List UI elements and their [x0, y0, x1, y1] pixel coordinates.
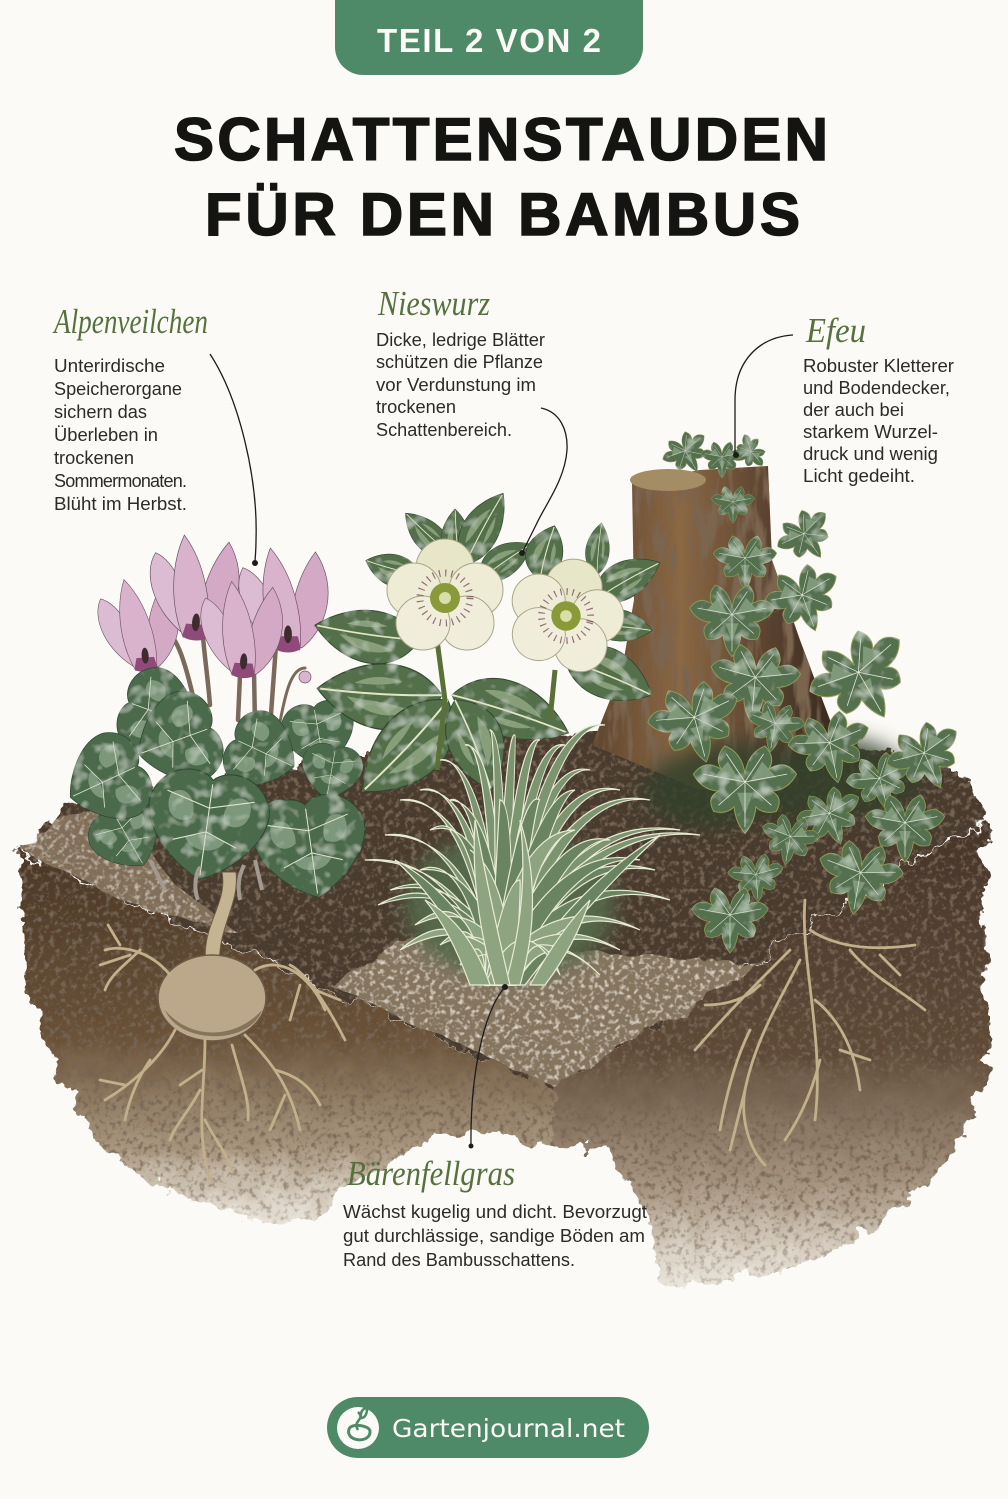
description: sichern das	[54, 402, 147, 422]
description: Robuster Kletterer	[803, 356, 954, 376]
hellebore back leaves	[311, 483, 668, 817]
front blades	[400, 820, 640, 985]
callout: Nieswurz	[376, 284, 567, 556]
grass shadow mass	[405, 833, 615, 977]
description: starkem Wurzel-	[803, 422, 938, 442]
description: Schattenbereich.	[376, 420, 512, 440]
description: gut durchlässige, sandige Böden am	[343, 1226, 645, 1246]
leader dot	[519, 550, 525, 556]
callout: Efeu	[733, 311, 954, 486]
cyclamen leaves	[52, 660, 374, 905]
stump trunk	[592, 466, 845, 790]
leader line	[735, 335, 793, 455]
heading: Bärenfellgras	[347, 1154, 515, 1193]
hellebore flower left	[387, 539, 503, 650]
description: Sommermonaten.	[54, 471, 187, 491]
description: trockenen	[376, 397, 456, 417]
description: Überleben in	[54, 425, 158, 445]
soil cross-section illustration	[20, 730, 988, 1285]
description: Unterirdische	[54, 356, 165, 376]
description: druck und wenig	[803, 444, 938, 464]
header badge: Teil 2 von 2	[335, 0, 643, 75]
back blades	[365, 725, 700, 985]
soil top surface	[20, 730, 988, 1088]
logo icon	[337, 1407, 379, 1449]
gravel band at front edge	[330, 935, 760, 1086]
description: und Bodendecker,	[803, 378, 950, 398]
description	[54, 356, 187, 514]
cyclamen tuber	[158, 955, 266, 1041]
cyclamen tuber stalk	[205, 872, 236, 968]
plant: ivy (Efeu)	[641, 425, 975, 953]
leader dot	[733, 452, 739, 458]
description	[803, 356, 954, 486]
footer logo badge	[327, 1397, 649, 1458]
description: vor Verdunstung im	[376, 375, 536, 395]
cyclamen flower stems	[160, 630, 305, 728]
heading: Nieswurz	[377, 284, 490, 323]
leader dot	[252, 560, 258, 566]
title: SCHATTENSTAUDEN	[174, 106, 828, 173]
cyclamen roots	[100, 925, 345, 1180]
middle blades	[378, 790, 670, 985]
dark foliage under ivy	[640, 738, 925, 827]
cyclamen flowers	[96, 533, 328, 680]
description: Blüht im Herbst.	[54, 494, 187, 514]
leader line	[471, 987, 505, 1146]
header badge: Teil 2 von 2: TEIL 2 VON 2	[377, 22, 601, 59]
hellebore flower right	[498, 545, 636, 680]
description	[376, 330, 545, 440]
description: trockenen	[54, 448, 134, 468]
description: Dicke, ledrige Blätter	[376, 330, 545, 350]
lighter left rim	[22, 800, 240, 935]
description	[343, 1202, 647, 1270]
description: Speicherorgane	[54, 379, 182, 399]
cyclamen bud	[299, 671, 311, 683]
plant: stump	[592, 466, 845, 790]
description: der auch bei	[803, 400, 904, 420]
leader line	[210, 354, 256, 563]
title: FÜR DEN BAMBUS	[205, 181, 800, 248]
plant: cyclamen (Alpenveilchen)	[52, 533, 374, 1180]
title	[174, 106, 828, 248]
logo wordmark: Gartenjournal.net	[392, 1414, 625, 1443]
soil right face	[553, 818, 986, 1285]
leader line	[522, 408, 567, 553]
ivy roots	[695, 900, 925, 1165]
heading: Alpenveilchen	[52, 302, 208, 341]
description: schützen die Pflanze	[376, 352, 543, 372]
description: Wächst kugelig und dicht. Bevorzugt	[343, 1202, 647, 1222]
heading: Efeu	[805, 311, 866, 350]
stump top rim	[630, 469, 706, 491]
callout: Bärenfellgras	[343, 984, 647, 1270]
plant: liriope grass (Bärenfellgras)	[365, 725, 700, 985]
leader dots	[468, 984, 508, 1148]
soil left face	[20, 852, 553, 1223]
description: Rand des Bambusschattens.	[343, 1250, 575, 1270]
description: Licht gedeiht.	[803, 466, 915, 486]
callout: Alpenveilchen	[52, 302, 258, 566]
plant: hellebore (Nieswurz)	[311, 483, 668, 817]
hellebore stems	[437, 640, 555, 770]
tuber shading	[165, 1010, 262, 1036]
